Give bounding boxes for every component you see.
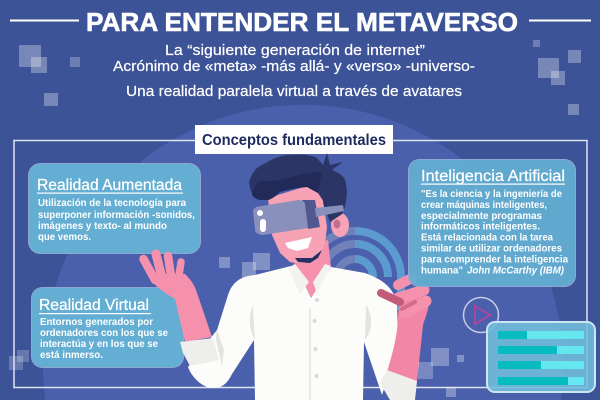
heading: conceptos fundamentales: Conceptos fundamentales bbox=[202, 132, 386, 149]
right cuff bbox=[380, 370, 417, 400]
panel: realidad virtual bbox=[32, 288, 184, 368]
right fingers bbox=[398, 278, 426, 313]
thumb and crease bbox=[381, 293, 415, 309]
decorative squares near hand bbox=[418, 348, 464, 397]
panel: inteligencia artificial: John McCarthy (IBM) bbox=[467, 266, 565, 276]
panel: inteligencia artificial: Está relacionada con la tarea bbox=[421, 232, 553, 244]
right forearm and palm bbox=[387, 296, 429, 382]
title: PARA ENTENDER EL METAVERSO bbox=[86, 9, 518, 37]
subtitle text: La “siguiente generación de internet” bbox=[165, 43, 425, 59]
background circle bbox=[43, 105, 563, 400]
icon: signal arcs bbox=[309, 231, 401, 310]
panel: realidad virtual: Entornos generados por bbox=[40, 317, 153, 328]
subtitle text: Acrónimo de «meta» -más allá- y «verso» -universo- bbox=[113, 59, 475, 75]
decorative squares right bbox=[533, 40, 581, 115]
panel: realidad aumentada: Realidad Aumentada bbox=[37, 177, 182, 194]
panel: realidad aumentada: que vemos. bbox=[38, 232, 91, 243]
headset bbox=[302, 200, 320, 229]
shirt details bbox=[216, 305, 371, 367]
left hand bbox=[144, 254, 212, 342]
icon: play button bbox=[464, 298, 498, 332]
panel: inteligencia artificial bbox=[408, 160, 576, 286]
shirt bbox=[188, 265, 398, 400]
subtitle text bbox=[113, 43, 475, 100]
panel: realidad aumentada: superponer información -sonidos, bbox=[38, 210, 195, 221]
panel: realidad virtual: ordenadores con los que se bbox=[40, 328, 168, 339]
heading: conceptos fundamentales bbox=[195, 125, 393, 154]
decorative squares behind figure bbox=[219, 253, 270, 279]
panel: inteligencia artificial: especialmente programas bbox=[421, 211, 542, 222]
panel: inteligencia artificial: "Es la ciencia y la ingeniería de bbox=[421, 189, 562, 200]
hair bbox=[249, 153, 347, 222]
figure: man with VR headset bbox=[144, 153, 429, 400]
face bbox=[268, 186, 327, 263]
smile bbox=[285, 237, 312, 251]
hair back bbox=[318, 180, 347, 222]
panel: realidad aumentada: Utilización de la tecnología para bbox=[38, 198, 186, 209]
ear bbox=[331, 213, 349, 237]
left cuff bbox=[180, 338, 219, 366]
subtitle text: Una realidad paralela virtual a través de avatares bbox=[126, 84, 462, 100]
panel: realidad virtual: está inmerso. bbox=[40, 350, 103, 361]
panel: inteligencia artificial: humana" bbox=[421, 266, 463, 276]
collar bbox=[288, 264, 331, 294]
panel: inteligencia artificial: Inteligencia Artificial bbox=[421, 168, 565, 185]
concept frame bbox=[14, 140, 587, 388]
panel: inteligencia artificial: crear máquinas inteligentes, bbox=[421, 200, 547, 211]
panel: realidad aumentada bbox=[28, 164, 200, 254]
panel: realidad virtual: interactúa y en los que se bbox=[40, 339, 158, 350]
decorative squares left bbox=[9, 45, 80, 370]
panel: inteligencia artificial: similar de utilizar ordenadores bbox=[421, 244, 562, 254]
panel: realidad virtual: Realidad Virtual bbox=[39, 297, 149, 314]
panel: inteligencia artificial: informáticos inteligentes. bbox=[421, 222, 540, 232]
panel: progress bars bbox=[487, 322, 595, 392]
mouth shadow bbox=[295, 250, 322, 263]
panel: realidad aumentada: imágenes y texto- al mundo bbox=[38, 221, 167, 232]
neck bbox=[290, 240, 331, 298]
panel: inteligencia artificial: para comprender la inteligencia bbox=[421, 254, 568, 266]
